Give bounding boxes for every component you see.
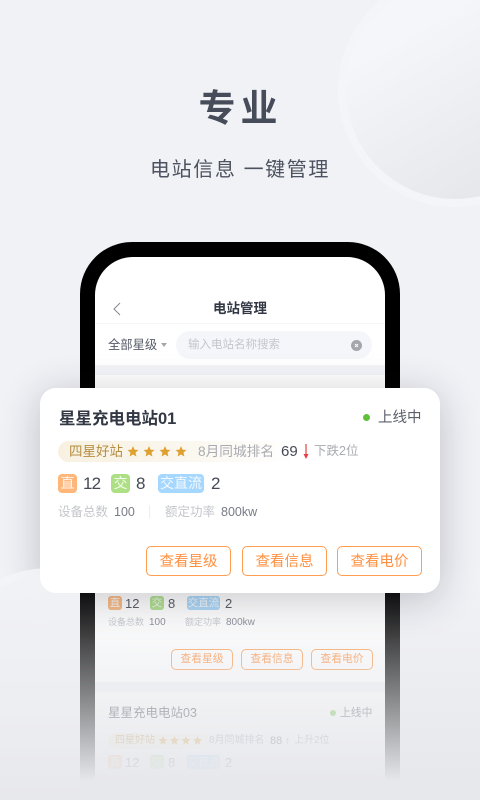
tag: AC bbox=[150, 596, 164, 610]
station name: 星星充电电站03 bbox=[108, 706, 197, 720]
status bbox=[363, 409, 422, 426]
button: view price bbox=[337, 546, 422, 576]
background circle: top right bbox=[338, 0, 480, 207]
type counts: 直 bbox=[110, 756, 120, 768]
tag: AC: 交 bbox=[114, 475, 128, 491]
ranking label: 8月同城排名 bbox=[198, 444, 274, 459]
AC count: 8 bbox=[136, 474, 145, 493]
type counts: 2 bbox=[225, 755, 232, 770]
icon: dropdown arrow bbox=[161, 343, 167, 350]
rating row: 8月同城排名 bbox=[209, 735, 265, 746]
button: view info bbox=[242, 546, 327, 576]
action buttons bbox=[146, 546, 422, 576]
device stats: 额定功率 bbox=[185, 617, 221, 627]
AC DC count: 2 bbox=[225, 596, 232, 611]
rating row: ↑ bbox=[285, 735, 290, 747]
device stats bbox=[108, 617, 255, 628]
button: view info: 查看信息 bbox=[250, 653, 294, 665]
background circle: bottom left bbox=[20, 568, 80, 620]
rating label: 四星好站 bbox=[69, 444, 123, 459]
device stats: 额定功率 bbox=[165, 505, 215, 519]
tag: DC bbox=[58, 474, 77, 493]
icon: clear search bbox=[351, 340, 362, 351]
tag: AC DC: 交直流 bbox=[160, 475, 202, 491]
tag: AC DC: 交直流 bbox=[188, 597, 219, 609]
rating row bbox=[115, 734, 330, 747]
rating row bbox=[58, 441, 358, 462]
status: 上线中 bbox=[340, 707, 372, 719]
card shadow bbox=[40, 388, 440, 593]
button: view rating bbox=[146, 546, 231, 576]
device stats: 100 bbox=[114, 505, 135, 519]
search box bbox=[176, 331, 372, 359]
device stats: 设备总数 bbox=[108, 617, 144, 627]
inner circle bbox=[346, 0, 480, 199]
floating station card bbox=[40, 388, 440, 593]
type counts bbox=[108, 755, 232, 770]
star filter dropdown: 全部星级 bbox=[108, 338, 157, 352]
phone screen bbox=[95, 257, 385, 800]
action buttons bbox=[171, 649, 373, 670]
list gap bbox=[95, 682, 385, 692]
type counts: 交直流 bbox=[188, 756, 219, 768]
header divider bbox=[95, 323, 385, 324]
phone mockup bbox=[80, 242, 400, 800]
outer ring bbox=[0, 568, 168, 800]
type counts bbox=[108, 596, 232, 611]
icon: back chevron bbox=[113, 302, 120, 316]
list gap bbox=[95, 365, 385, 375]
button: view rating: 查看星级 bbox=[160, 554, 218, 570]
title: 专业 bbox=[198, 88, 282, 129]
AC DC count: 2 bbox=[211, 474, 220, 493]
type counts: 8 bbox=[168, 755, 175, 770]
DC count: 12 bbox=[125, 596, 139, 611]
type counts: 12 bbox=[125, 755, 139, 770]
DC count: 12 bbox=[83, 474, 100, 493]
button: view price bbox=[311, 649, 373, 670]
tag: DC: 直 bbox=[110, 597, 120, 609]
button: view price: 查看电价 bbox=[350, 554, 408, 570]
rating row: 88 bbox=[270, 735, 282, 747]
button: view price: 查看电价 bbox=[320, 653, 364, 665]
device stats: 设备总数 bbox=[58, 505, 108, 519]
ranking change: 下跌2位 bbox=[314, 444, 358, 458]
tag: DC: 直 bbox=[60, 475, 74, 491]
subtitle: 电站信息 一键管理 bbox=[150, 159, 330, 181]
icon: red down arrow bbox=[304, 444, 308, 459]
button: view rating: 查看星级 bbox=[180, 653, 224, 665]
device stats: 100 bbox=[149, 617, 166, 628]
station name: 星星充电电站01 bbox=[59, 410, 176, 428]
search placeholder: 输入电站名称搜索 bbox=[188, 339, 280, 351]
type counts: 交 bbox=[152, 756, 162, 768]
type counts bbox=[58, 474, 220, 493]
tag: AC bbox=[111, 474, 130, 493]
ranking number: 69 bbox=[281, 443, 298, 460]
status dot bbox=[363, 414, 370, 421]
rating row: 上升2位 bbox=[294, 735, 330, 746]
device stats bbox=[58, 505, 258, 519]
button: view info: 查看信息 bbox=[256, 554, 314, 570]
icon: four stars bbox=[128, 446, 186, 456]
tag: AC: 交 bbox=[152, 597, 162, 609]
AC count: 8 bbox=[168, 596, 175, 611]
device stats: 800kw bbox=[221, 505, 257, 519]
rating row: 四星好站 bbox=[115, 735, 155, 746]
rating pill bbox=[58, 441, 298, 462]
screen heading: 电站管理 bbox=[213, 301, 267, 316]
station card 03 bbox=[95, 692, 385, 800]
tag: DC bbox=[108, 596, 122, 610]
status text: 上线中 bbox=[378, 410, 422, 426]
button: view rating bbox=[171, 649, 233, 670]
inner circle bbox=[0, 576, 160, 800]
bottom fade overlay bbox=[0, 590, 480, 800]
device stats: 800kw bbox=[226, 617, 255, 628]
button: view info bbox=[241, 649, 303, 670]
station card 02 bbox=[95, 376, 385, 682]
